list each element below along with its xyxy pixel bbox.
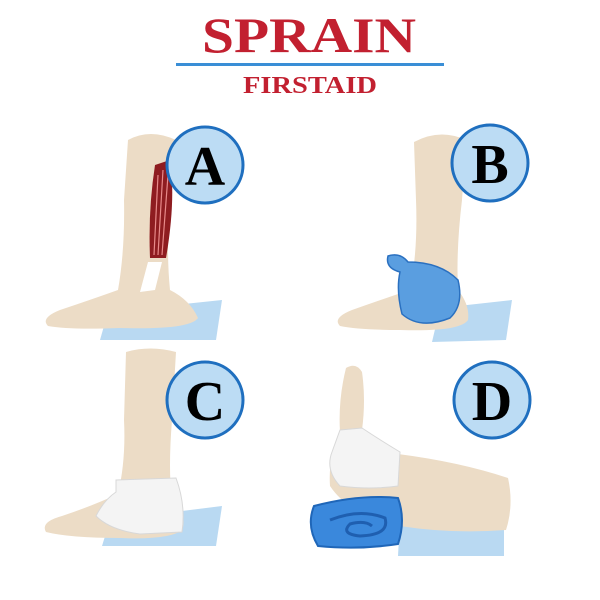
letter circle D: D — [472, 371, 512, 433]
letter circle C: C — [185, 371, 225, 433]
title: FIRSTAID — [243, 73, 377, 99]
letter circle B — [452, 125, 528, 201]
title — [176, 7, 444, 99]
panel D: elevation with ice — [311, 362, 530, 556]
letter circle D — [454, 362, 530, 438]
letter circle A — [167, 127, 243, 203]
panel A: torn muscle — [46, 127, 243, 340]
panel B: ice bag — [338, 125, 528, 342]
letter circle B: B — [471, 134, 509, 196]
title: SPRAIN — [202, 7, 416, 63]
panel C: bandage — [45, 348, 243, 546]
letter circle C — [167, 362, 243, 438]
letter circle A: A — [185, 136, 226, 198]
